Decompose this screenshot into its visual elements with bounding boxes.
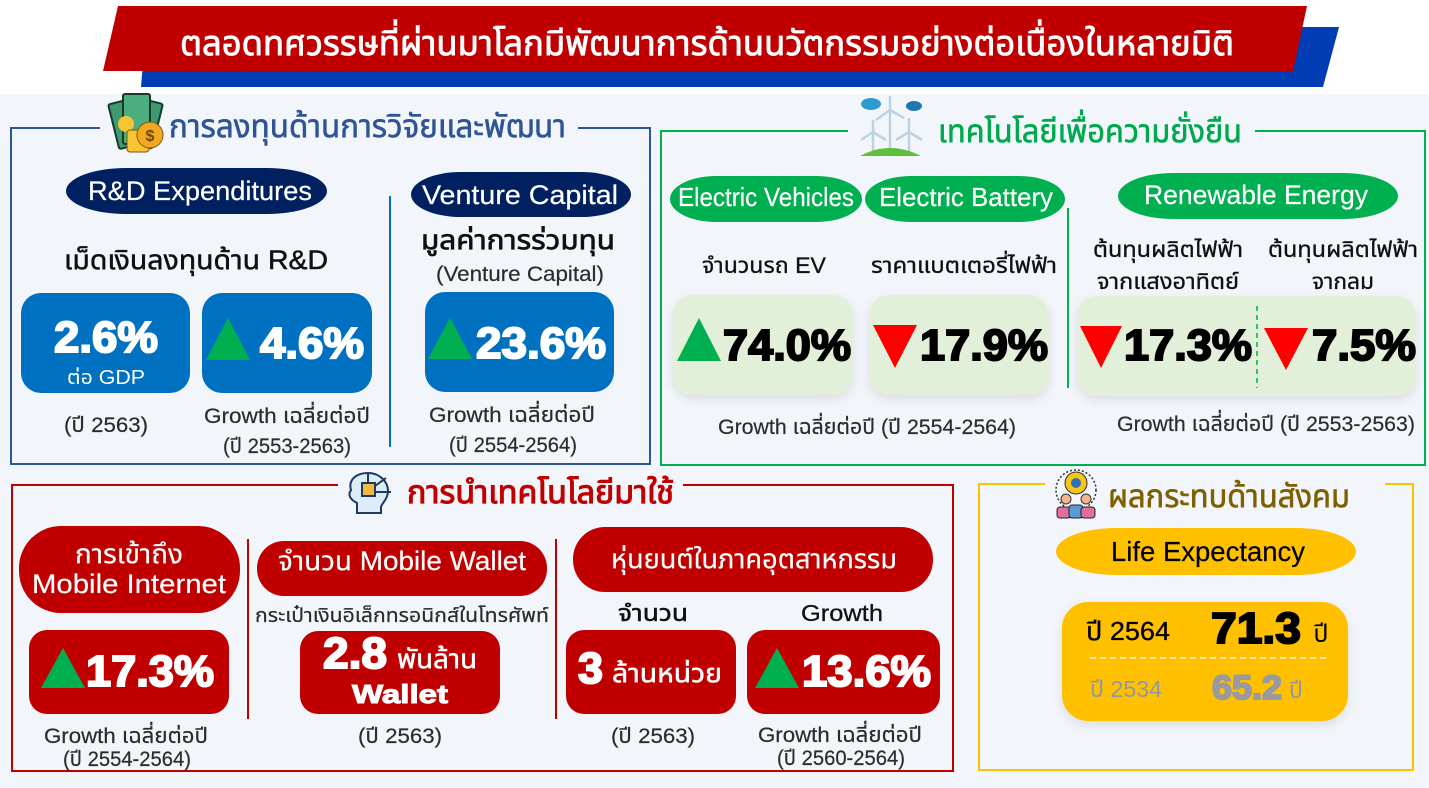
- pill: Renewable Energy: [1118, 173, 1398, 219]
- pill: Life Expectancy: Life Expectancy: [1111, 536, 1305, 567]
- heading: R&D investment: การลงทุนด้านการวิจัยและพัฒนา: [169, 108, 566, 145]
- label: solar cost: จากแสงอาทิตย์: [1097, 269, 1239, 294]
- label: e-wallet description: กระเป๋าเงินอิเล็กทรอนิกส์ในโทรศัพท์: [255, 605, 549, 627]
- pill: Electric Battery: [865, 176, 1065, 222]
- stat: 2.6% of GDP: 2.6%: [54, 313, 158, 362]
- pill: Electric Battery: Electric Battery: [879, 182, 1053, 212]
- stat: 2.6% of GDP: [21, 293, 190, 393]
- icon: money and coins: $: [146, 128, 155, 145]
- label: venture capital value: [421, 225, 615, 286]
- stat: 2.8 trillion wallets: Wallet: [352, 679, 448, 709]
- caption: growth 2553-2563: Growth เฉลี่ยต่อปี (ปี 2553-2563): [1117, 409, 1415, 436]
- icon: AI head: [349, 472, 391, 513]
- stat: 13.6% robot growth: 13.6%: [802, 647, 931, 696]
- caption: growth 2554-2564: Growth เฉลี่ยต่อปี: [429, 400, 595, 427]
- stat: 2.8 trillion wallets: [300, 629, 500, 714]
- panel: R&D investment: [11, 94, 650, 464]
- heading: social impact: ผลกระทบด้านสังคม: [1108, 478, 1350, 514]
- stat: 2.6% of GDP: ต่อ GDP: [67, 366, 145, 389]
- caption: growth 2560-2564: (ปี 2560-2564): [777, 747, 905, 770]
- stat: 74.0% EV growth: 74.0%: [723, 321, 851, 370]
- pill: industrial robots: [573, 527, 933, 592]
- caption: year 2563: (ปี 2563): [358, 725, 442, 748]
- caption: growth 2553-2563: [204, 401, 370, 458]
- panel: social impact: [979, 470, 1413, 770]
- stat: 2.8 trillion wallets: พันล้าน: [397, 644, 477, 674]
- pill: mobile wallet: [257, 541, 547, 596]
- stat card: life expectancy: ปี: [1289, 677, 1303, 703]
- stat: 23.6% growth: 23.6%: [476, 319, 606, 368]
- stat: 23.6% growth: [425, 292, 614, 392]
- caption: year 2563: (ปี 2563): [64, 414, 148, 437]
- caption: growth 2554-2564: (ปี 2554-2564): [63, 748, 191, 771]
- stat: 17.3% internet growth: [29, 630, 229, 714]
- pill: R&D Expenditures: R&D Expenditures: [88, 176, 312, 206]
- label: wind cost: จากลม: [1312, 269, 1374, 294]
- label: solar cost: ต้นทุนผลิตไฟฟ้า: [1093, 237, 1243, 263]
- icon: wind turbines: [860, 96, 922, 156]
- label: solar cost: [1093, 237, 1243, 294]
- stat: 17.9% battery decline: [869, 295, 1049, 395]
- label: R&D funding: เม็ดเงินลงทุนด้าน R&D: [64, 245, 328, 276]
- caption: year 2563: (ปี 2563): [611, 725, 695, 748]
- stat card: life expectancy: ปี 2534: [1090, 676, 1162, 702]
- stat: 13.6% robot growth: [747, 630, 940, 714]
- caption: growth 2554-2564: Growth เฉลี่ยต่อปี: [44, 721, 208, 748]
- caption: growth 2560-2564: [758, 720, 922, 770]
- label: battery price: ราคาแบตเตอรี่ไฟฟ้า: [871, 250, 1057, 278]
- heading: technology adoption: การนำเทคโนโลยีมาใช้: [407, 474, 674, 510]
- pill: Electric Vehicles: [670, 176, 862, 222]
- heading: sustainability technology: เทคโนโลยีเพื่อความยั่งยืน: [938, 109, 1242, 149]
- pill: Venture Capital: [411, 172, 631, 217]
- stat: renewable declines: 7.5%: [1312, 321, 1416, 370]
- stat: 3 million robots: 3: [578, 644, 603, 693]
- stat: 4.6% growth: [202, 293, 372, 393]
- panel: sustainability technology: [661, 96, 1425, 465]
- stat: 17.9% battery decline: 17.9%: [920, 321, 1048, 370]
- pill: mobile internet: [19, 526, 240, 613]
- title banner: ตลอดทศวรรษที่ผ่านมาโลกมีพัฒนาการด้านนวัตกรรมอย่างต่อเนื่องในหลายมิติ: [180, 19, 1234, 63]
- stat: 17.3% internet growth: 17.3%: [86, 647, 214, 696]
- pill: Venture Capital: Venture Capital: [422, 180, 618, 210]
- label: venture capital value: (Venture Capital): [436, 263, 604, 286]
- stat card: life expectancy: 65.2: [1212, 669, 1282, 707]
- pill: Life Expectancy: [1056, 528, 1356, 575]
- stat: 4.6% growth: 4.6%: [260, 319, 364, 368]
- stat: 3 million robots: ล้านหน่วย: [612, 658, 722, 688]
- caption: growth 2553-2563: Growth เฉลี่ยต่อปี: [204, 401, 370, 428]
- caption: growth 2553-2563: (ปี 2553-2563): [223, 435, 351, 458]
- caption: growth 2554-2564: [44, 721, 208, 771]
- pill: mobile internet: การเข้าถึง: [75, 539, 183, 569]
- stat card: life expectancy: ปี: [1313, 620, 1329, 648]
- stat card: life expectancy: [1062, 602, 1348, 721]
- stat card: life expectancy: 71.3: [1211, 604, 1301, 653]
- caption: growth 2554-2564: (ปี 2554-2564): [449, 434, 577, 457]
- pill: R&D Expenditures: [66, 168, 327, 214]
- stat: 2.8 trillion wallets: 2.8: [323, 629, 387, 678]
- label: count: จำนวน: [618, 600, 688, 626]
- caption: growth 2554-2564: Growth เฉลี่ยต่อปี (ปี 2554-2564): [718, 412, 1016, 439]
- pill: industrial robots: หุ่นยนต์ในภาคอุตสาหกรรม: [611, 544, 897, 575]
- pill: Electric Vehicles: Electric Vehicles: [678, 182, 854, 212]
- label: growth: Growth: [801, 600, 883, 626]
- stat: 74.0% EV growth: [673, 295, 853, 395]
- icon: money and coins: [108, 94, 163, 152]
- caption: growth 2554-2564: [429, 400, 595, 457]
- pill: mobile wallet: จำนวน Mobile Wallet: [278, 546, 527, 576]
- stat: 3 million robots: [566, 630, 736, 714]
- stat: renewable declines: 17.3%: [1124, 321, 1252, 370]
- label: wind cost: ต้นทุนผลิตไฟฟ้า: [1268, 237, 1418, 263]
- caption: growth 2560-2564: Growth เฉลี่ยต่อปี: [758, 720, 922, 747]
- label: wind cost: [1268, 237, 1418, 294]
- stat: renewable declines: [1077, 296, 1416, 396]
- icon: community gear: [1056, 470, 1096, 518]
- pill: mobile internet: Mobile Internet: [32, 569, 227, 599]
- panel: technology adoption: [12, 472, 953, 771]
- label: EV count: จำนวนรถ EV: [702, 253, 826, 278]
- label: venture capital value: มูลค่าการร่วมทุน: [421, 225, 615, 256]
- stat card: life expectancy: ปี 2564: [1086, 616, 1170, 646]
- pill: Renewable Energy: Renewable Energy: [1144, 180, 1368, 210]
- title banner: [103, 6, 1339, 87]
